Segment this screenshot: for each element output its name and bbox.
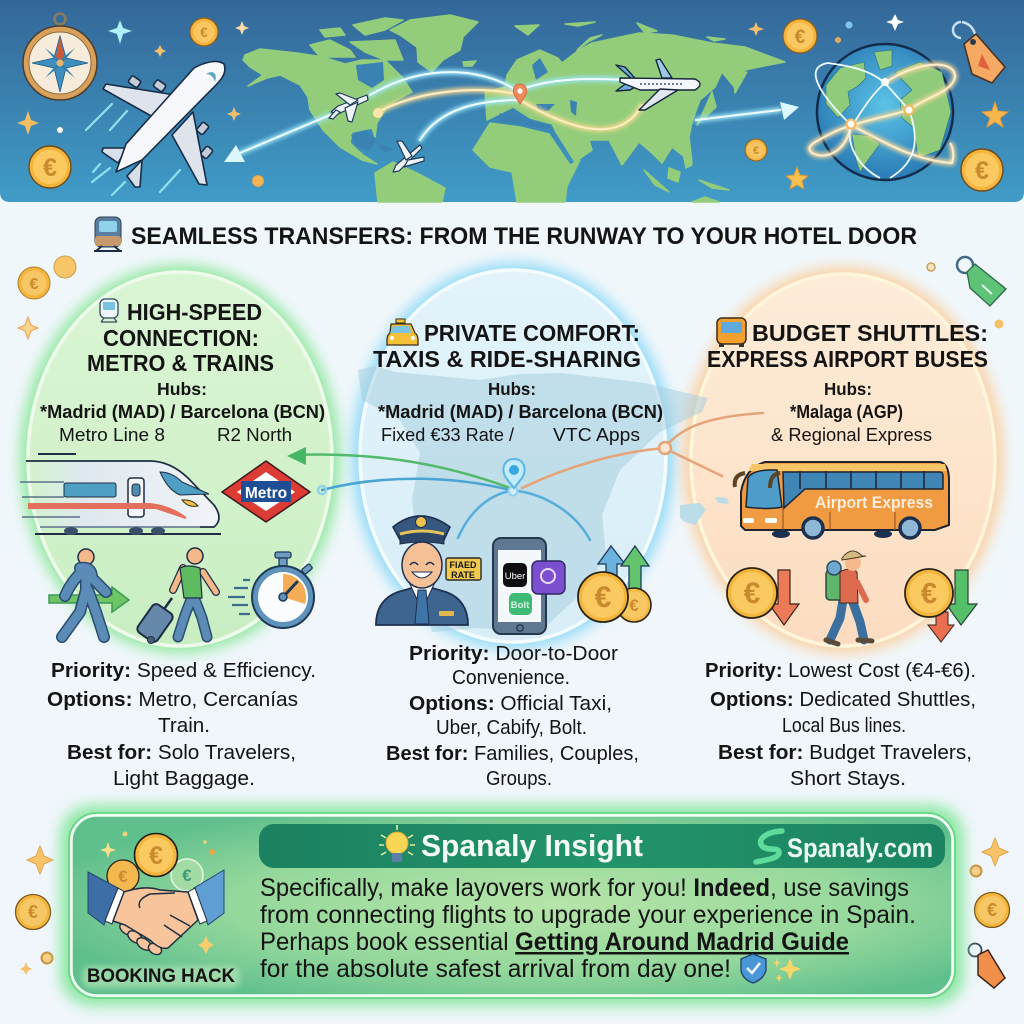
blue column details: Convenience. (452, 667, 570, 689)
header banner: world map and travel icons (0, 0, 1024, 202)
oval glow (352, 263, 674, 649)
panel outer rim (69, 813, 955, 998)
green column details: Options: Metro, Cercanías (47, 689, 298, 711)
blue column details: Best for: Families, Couples, (386, 743, 639, 765)
banner sky (0, 0, 1024, 202)
icon: price tag (953, 22, 1005, 83)
orange column details: Priority: Lowest Cost (€4-€6). (705, 660, 976, 682)
icon: coin with down arrow: € (744, 577, 761, 610)
orange column heading (707, 318, 988, 445)
blue column heading (373, 319, 663, 445)
label backing glow (82, 966, 240, 988)
icon: spanaly logo (756, 831, 782, 862)
green column heading: *Madrid (MAD) / Barcelona (BCN) (40, 402, 325, 422)
heading lines: BUDGET SHUTTLES: (752, 320, 988, 346)
sparkles and stars (17, 14, 1008, 189)
hubs: Hubs: (488, 379, 536, 399)
arrow: green route head (287, 447, 306, 465)
orange city glow (373, 108, 383, 118)
sparkle (982, 838, 1008, 866)
coin (961, 149, 1003, 191)
connecting routes (292, 413, 764, 540)
arrowheads on flight arcs (224, 102, 799, 162)
blue column details: Priority: Door-to-Door (409, 643, 618, 665)
icon: small airplane south (393, 141, 424, 172)
coin: € (987, 900, 997, 920)
orange column heading: *Malaga (AGP) (790, 402, 903, 422)
orange column details: Local Bus lines. (782, 715, 906, 737)
coin: € (149, 842, 163, 870)
coin: € (30, 276, 39, 293)
fixed rate badge: FIAED (450, 560, 477, 570)
icon: taxi (387, 319, 418, 345)
hubs: Hubs: (157, 379, 207, 399)
route node (508, 442, 671, 496)
sparkle (27, 846, 53, 874)
icon: high-speed train (20, 454, 221, 535)
side decorations (16, 256, 1010, 988)
insight body text: Perhaps book essential Getting Around Madrid Guide (260, 928, 849, 956)
blue column heading: Fixed €33 Rate / (381, 425, 514, 445)
insight body text (260, 874, 916, 983)
coin: € (28, 902, 38, 922)
insight body text: from connecting flights to upgrade your experience in Spain. (260, 901, 916, 929)
coin (745, 139, 767, 161)
orange column details: Options: Dedicated Shuttles, (710, 689, 976, 711)
icon: globe with orbits (809, 44, 955, 180)
icon: walking traveler with arrow (49, 549, 129, 637)
icon: phone with ride apps: Bolt (511, 600, 530, 611)
oval glow (683, 267, 1003, 653)
icon: phone with ride apps: Uber (505, 571, 525, 582)
icon: train (94, 217, 122, 251)
icon: phone with ride apps (493, 538, 565, 634)
green column details: Light Baggage. (113, 768, 255, 790)
blue column heading: TAXIS & RIDE-SHARING (373, 346, 641, 372)
icon: small airplane west (329, 93, 368, 122)
icon: metro sign: Metro (245, 485, 287, 502)
orange column heading: EXPRESS AIRPORT BUSES (707, 346, 988, 372)
blue column details: Uber, Cabify, Bolt. (436, 717, 587, 739)
icon: coin with two down arrows (905, 569, 977, 642)
hubs: Hubs: (824, 379, 872, 399)
blue column details: Groups. (486, 768, 552, 790)
icon: stopwatch (228, 552, 314, 628)
dot (927, 263, 935, 271)
icon: coins with up arrows: € (595, 581, 612, 614)
orange column details: Best for: Budget Travelers, (718, 742, 972, 764)
dot (970, 866, 982, 876)
speed lines (86, 104, 180, 195)
panel: green metro oval (20, 265, 340, 653)
green column heading: Metro Line 8 (59, 425, 165, 445)
world map (243, 15, 785, 202)
oval fill (360, 270, 666, 642)
inland seas (351, 58, 577, 152)
insight body text: Specifically, make layovers work for you! Indeed, use savings (260, 874, 909, 902)
icon: driver (376, 516, 468, 625)
icon: bus (717, 318, 746, 347)
sparkle (20, 962, 32, 975)
green price tag (957, 257, 1006, 306)
coin: € (753, 145, 759, 157)
coin (16, 894, 50, 930)
icon: handshake with coins (88, 832, 224, 957)
icon: location pin (503, 459, 525, 488)
coin (29, 146, 71, 188)
coin: € (975, 157, 989, 185)
coin (54, 256, 76, 278)
icon: airport express bus: Airport Express (815, 493, 933, 512)
icon: backpacker (826, 551, 872, 644)
coin: € (43, 154, 57, 182)
icon: large airplane (102, 61, 225, 187)
insight header bar (259, 824, 945, 868)
icon: compass (23, 14, 97, 100)
panel body (71, 815, 953, 996)
green column heading: R2 North (217, 425, 292, 445)
blue column heading: *Madrid (MAD) / Barcelona (BCN) (378, 402, 663, 422)
coin: € (182, 866, 192, 885)
orange column heading: & Regional Express (771, 425, 932, 445)
panel glow (60, 805, 964, 1006)
coin (783, 19, 817, 53)
dot (42, 952, 52, 964)
panel: blue taxis oval (352, 263, 674, 649)
icon: traveler with suitcase (135, 548, 216, 644)
coin: € (200, 24, 208, 40)
oval fill (28, 272, 332, 646)
spanaly url: Spanaly.com (787, 833, 933, 863)
icon: coins with up arrows (578, 546, 651, 622)
green column heading: CONNECTION: (103, 325, 259, 351)
fixed rate badge: RATE (451, 570, 475, 580)
panel: booking hack insight (60, 805, 964, 1006)
coin (18, 267, 50, 299)
section title (94, 217, 917, 251)
oval fill (691, 274, 995, 646)
icon: airport express bus (735, 462, 949, 538)
green column details: Train. (158, 715, 210, 737)
insight heading: Spanaly Insight (421, 828, 643, 863)
fixed rate badge (446, 558, 481, 580)
insight body text: for the absolute safest arrival from day one! (260, 955, 731, 983)
Spain map silhouette (358, 366, 708, 632)
green column details (47, 660, 316, 790)
blue column details (386, 643, 639, 790)
sparkle (18, 317, 38, 339)
icon: coin with two down arrows: € (921, 578, 937, 610)
booking hack label: BOOKING HACK (87, 966, 235, 987)
icon: location pin (513, 84, 527, 104)
icon: coins with up arrows: € (629, 596, 639, 615)
green column heading (40, 299, 325, 445)
title text: SEAMLESS TRANSFERS: FROM THE RUNWAY TO YOUR HOTEL DOOR (131, 223, 917, 250)
flight arcs (240, 72, 780, 153)
blue column details: Options: Official Taxi, (409, 693, 612, 715)
blue column heading: VTC Apps (553, 425, 640, 445)
icon: metro train (100, 299, 118, 322)
panel: orange shuttle oval (680, 267, 1003, 653)
coin (974, 892, 1010, 928)
green column details: Priority: Speed & Efficiency. (51, 660, 316, 682)
green column details: Best for: Solo Travelers, (67, 742, 296, 764)
oval glow (20, 265, 340, 653)
green column heading: METRO & TRAINS (87, 350, 274, 376)
icon: metro sign (222, 461, 310, 522)
orange tag (968, 944, 1005, 988)
coin (190, 18, 218, 46)
heading lines: HIGH-SPEED (127, 299, 262, 325)
island silhouettes (680, 497, 729, 525)
icon: coin with down arrow (727, 568, 799, 625)
icon: sparkles (773, 958, 801, 982)
icon: white airplane east (616, 59, 700, 110)
coin: € (118, 867, 128, 886)
icon: shield (741, 954, 766, 983)
coin: € (795, 27, 806, 48)
dot (994, 320, 1004, 328)
orange column details: Short Stays. (790, 768, 906, 790)
heading lines: PRIVATE COMFORT: (424, 320, 640, 346)
orange column details (705, 660, 976, 790)
icon: light bulb (379, 825, 415, 862)
